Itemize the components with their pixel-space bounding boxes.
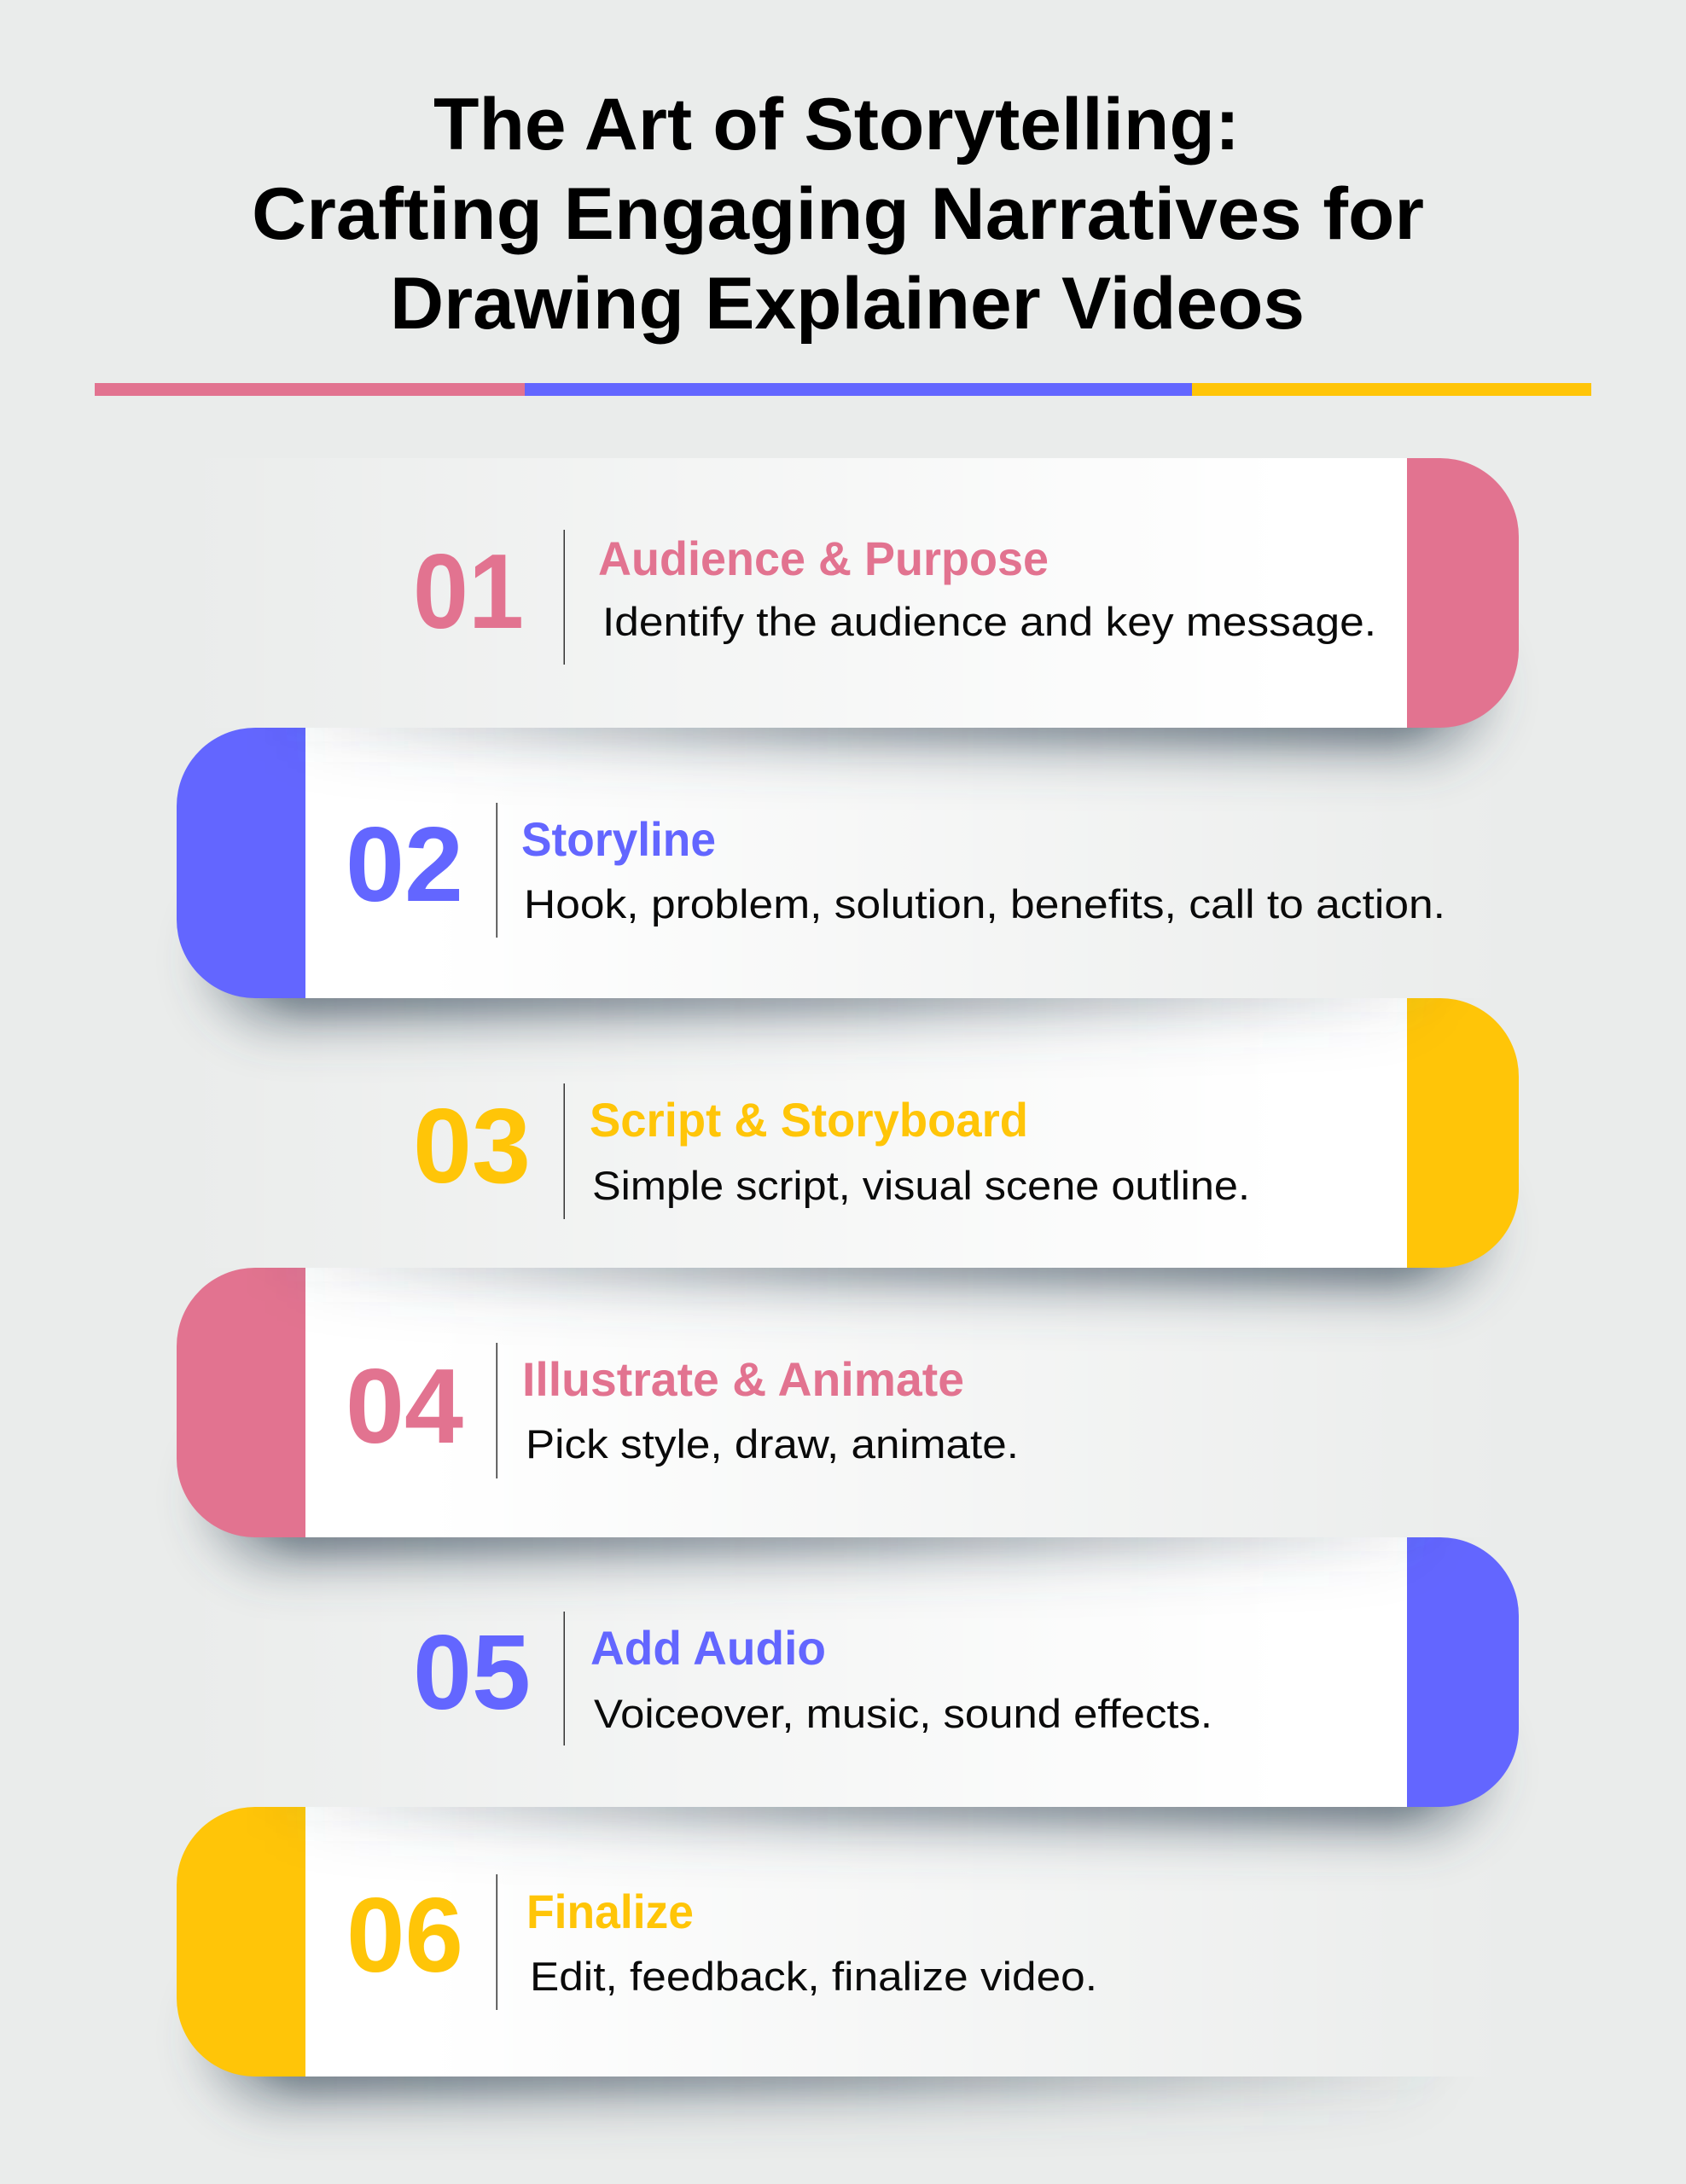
shadow: step 02 <box>205 887 1468 1032</box>
title <box>252 84 1424 345</box>
heading: Storyline: Storyline <box>521 812 716 866</box>
panel: step 04 Illustrate & Animate <box>177 1268 1519 1571</box>
text: Add Audio description: Voiceover, music, sound effects. <box>594 1691 1212 1736</box>
number: 02: 02 <box>346 806 463 924</box>
colour cap: step 06 <box>177 1807 305 2077</box>
colour cap: step 05 <box>1407 1537 1519 1807</box>
text: Storyline description: Hook, problem, solution, benefits, call to action. <box>524 881 1445 926</box>
shadow: step 03 <box>222 1157 1491 1302</box>
heading: Illustrate & Animate: Illustrate & Animate <box>522 1352 964 1406</box>
number: 06: 06 <box>346 1877 463 1995</box>
shadow: step 04 <box>205 1426 1468 1571</box>
colour cap: step 03 <box>1407 998 1519 1268</box>
title: The Art of Storytelling: <box>433 84 1240 166</box>
heading: Add Audio: Add Audio <box>590 1621 826 1675</box>
heading: Finalize: Finalize <box>526 1885 694 1938</box>
panel: step 03 Script & Storyboard <box>177 998 1519 1302</box>
number: 05: 05 <box>413 1614 531 1732</box>
panel: step 05 Add Audio <box>177 1537 1519 1841</box>
heading: Script & Storyboard: Script & Storyboard <box>590 1093 1028 1147</box>
panel: step 02 Storyline <box>177 728 1519 1032</box>
colour cap: step 02 <box>177 728 305 998</box>
text: Illustrate & Animate description: Pick style, draw, animate. <box>526 1421 1019 1467</box>
tri-colour rule <box>95 383 1591 396</box>
number: 04: 04 <box>346 1348 463 1466</box>
colour cap: step 04 <box>177 1268 305 1537</box>
panel: step 01 Audience & Purpose <box>177 458 1519 762</box>
heading: Audience & Purpose: Audience & Purpose <box>598 531 1049 585</box>
number: 03: 03 <box>413 1088 531 1205</box>
shadow: step 01 <box>222 617 1491 762</box>
number: 01: 01 <box>413 533 524 651</box>
text: Script & Storyboard description: Simple script, visual scene outline. <box>592 1163 1250 1208</box>
title: Crafting Engaging Narratives for <box>252 173 1424 255</box>
text: Finalize description: Edit, feedback, finalize video. <box>530 1954 1097 1999</box>
title: Drawing Explainer Videos <box>390 263 1305 345</box>
colour cap: step 01 <box>1407 458 1519 728</box>
shadow: step 05 <box>222 1696 1491 1841</box>
text: Audience & Purpose description: Identify the audience and key message. <box>602 599 1376 644</box>
panel: step 06 Finalize <box>177 1807 1519 2111</box>
shadow: step 06 <box>205 1966 1468 2111</box>
